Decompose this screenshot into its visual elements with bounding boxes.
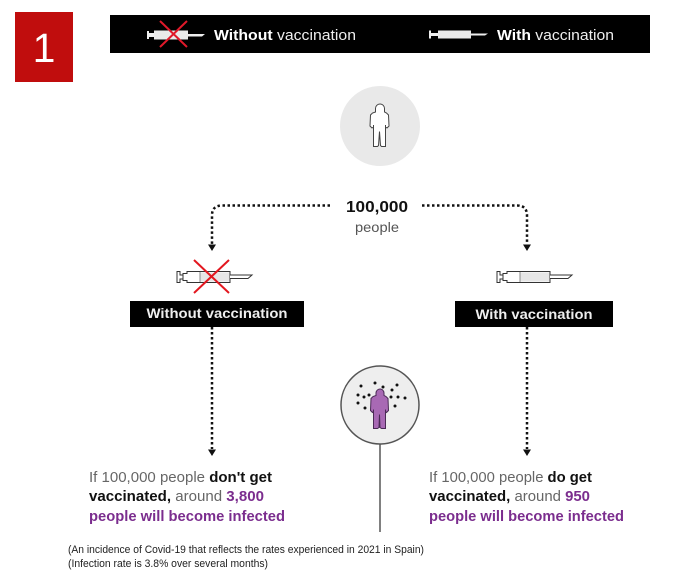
legend label: with vaccination: With vaccination bbox=[497, 27, 614, 44]
arrow: without vaccination outcome bbox=[208, 327, 216, 456]
text block: without vaccination result bbox=[89, 470, 285, 525]
text block: without vaccination result: vaccinated, around 3,800 bbox=[89, 489, 264, 505]
icon: crossed syringe legend bbox=[147, 21, 205, 47]
arrow: to with vaccination bbox=[422, 206, 531, 251]
text block: without vaccination result: people will become infected bbox=[89, 509, 285, 525]
icon: syringe legend bbox=[429, 30, 488, 38]
text block: with vaccination result: people will become infected bbox=[429, 509, 624, 525]
footnote bbox=[68, 544, 424, 570]
arrow: with vaccination outcome bbox=[523, 327, 531, 456]
page number badge: 1 bbox=[33, 25, 55, 71]
population label: 100,000 bbox=[346, 199, 408, 216]
legend label: without vaccination: Without vaccination bbox=[214, 27, 356, 44]
text block: without vaccination result: If 100,000 people don't get bbox=[89, 470, 272, 486]
heading: with vaccination: With vaccination bbox=[476, 306, 592, 322]
heading: with vaccination bbox=[455, 301, 613, 327]
text block: with vaccination result: If 100,000 people do get bbox=[429, 470, 592, 486]
arrow: to without vaccination bbox=[208, 206, 330, 251]
icon: syringe bbox=[497, 272, 572, 282]
heading: without vaccination: Without vaccination bbox=[146, 305, 288, 321]
legend bar bbox=[110, 15, 650, 53]
icon: person in grey circle bbox=[340, 86, 420, 166]
icon: crossed syringe bbox=[177, 260, 252, 293]
population label bbox=[346, 199, 408, 235]
icon: infected person in circle bbox=[341, 366, 419, 532]
footnote: (An incidence of Covid-19 that reflects the rates experienced in 2021 in Spain) bbox=[68, 544, 424, 556]
page number badge bbox=[15, 12, 73, 82]
text block: with vaccination result: vaccinated, around 950 bbox=[429, 489, 590, 505]
text block: with vaccination result bbox=[429, 470, 624, 525]
heading: without vaccination bbox=[130, 301, 304, 327]
footnote: (Infection rate is 3.8% over several months) bbox=[68, 558, 268, 570]
population label: people bbox=[355, 219, 399, 235]
